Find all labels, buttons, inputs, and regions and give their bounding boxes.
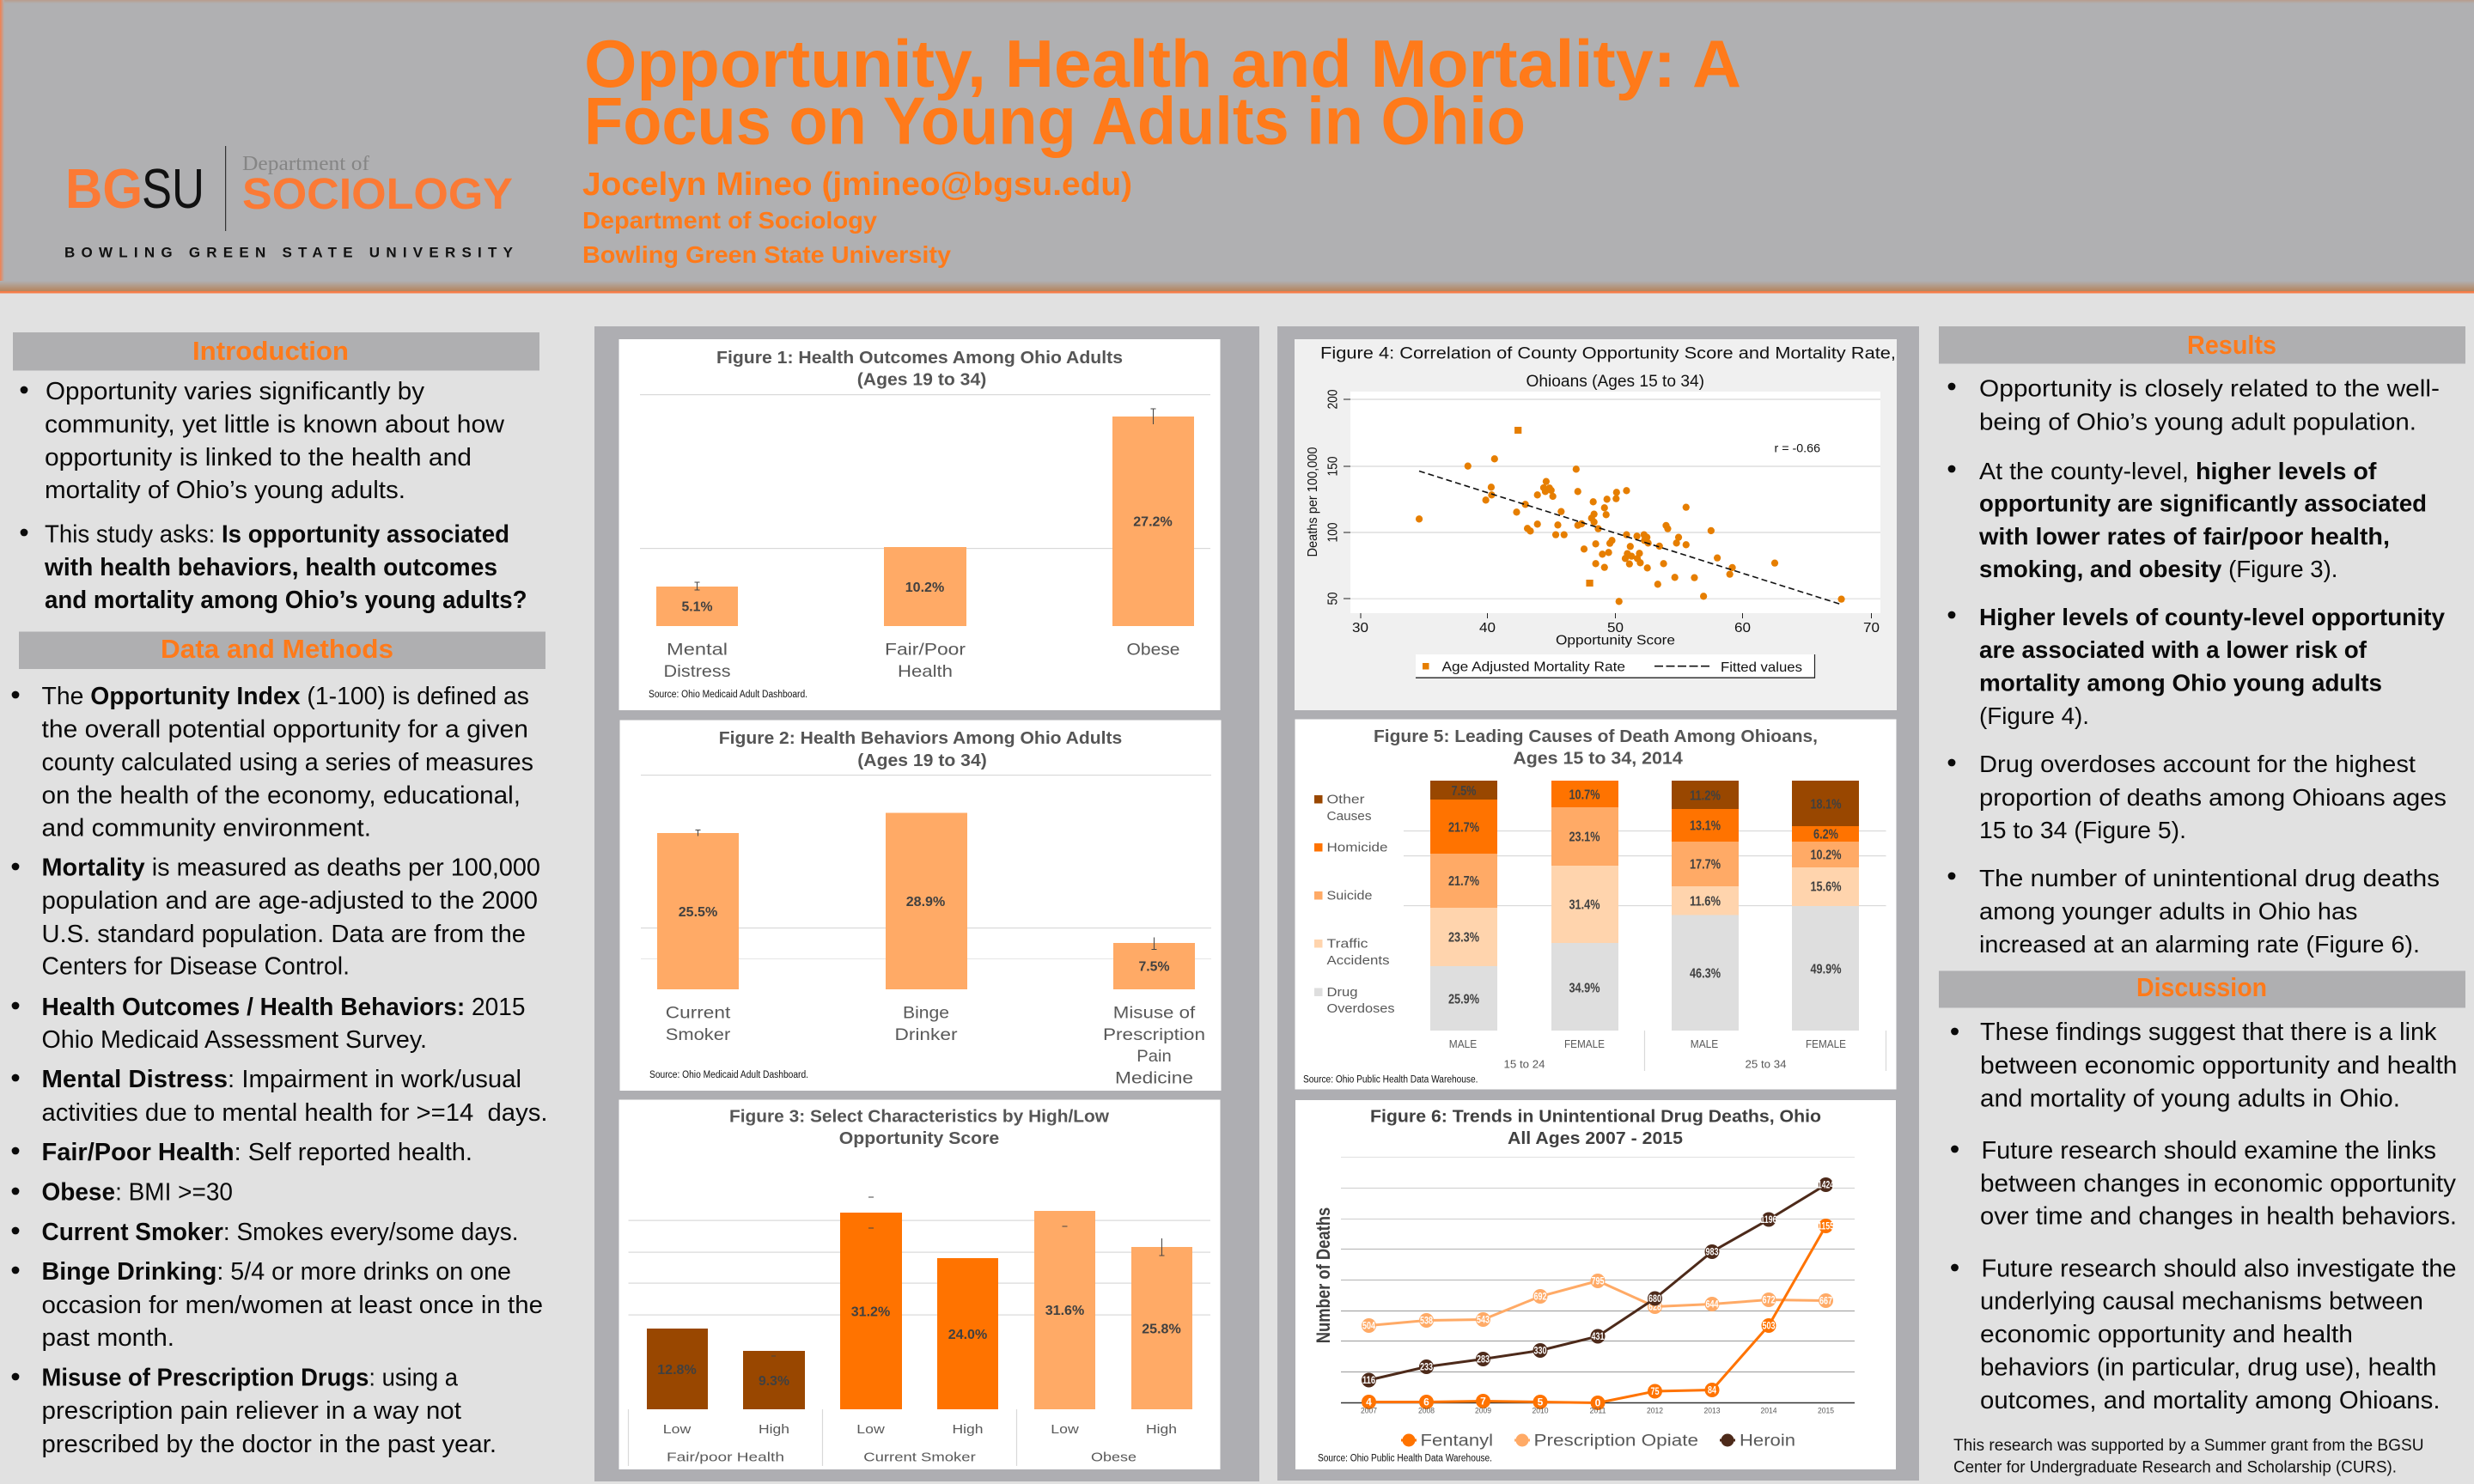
text block: introduction xyxy=(21,378,527,614)
series: prescription opiate: 538 xyxy=(1420,1314,1433,1326)
figure 1 title: (Ages 19 to 34) xyxy=(857,371,986,390)
scatter axes: 200 xyxy=(1326,389,1340,409)
figure 5 bar: male 25 to 34: 46.3% xyxy=(1690,967,1721,981)
panel: results heading xyxy=(1939,326,2465,364)
figure 5 bar: male 25 to 34: 11.2% xyxy=(1690,788,1721,804)
scatter axes: 60 xyxy=(1734,621,1751,636)
text block: discussion: Future research should examine the links xyxy=(1981,1137,2436,1165)
figure 6 source: Source: Ohio Public Health Data Warehouse. xyxy=(1318,1453,1492,1463)
scatter axes: 100 xyxy=(1326,522,1340,543)
figure 2 category labels: Current xyxy=(666,1003,731,1022)
text block: discussion: economic opportunity and health xyxy=(1980,1321,2353,1348)
series: heroin: 233 xyxy=(1420,1360,1433,1372)
series: heroin: 1196 xyxy=(1761,1213,1777,1226)
figure 3 bar chart: 25.8% xyxy=(1142,1323,1181,1336)
series: fentanyl: 5 xyxy=(1538,1396,1544,1408)
figure 5 bar: female 25 to 34: 6.2% xyxy=(1813,828,1838,842)
scatter axes: Opportunity Score xyxy=(1556,634,1675,648)
panel: introduction heading: Introduction xyxy=(192,336,349,366)
figure 5 bar: male 25 to 34: 13.1% xyxy=(1690,819,1721,833)
panel: data and methods heading: Data and Methods xyxy=(161,634,393,664)
year axis labels: 2010 xyxy=(1533,1407,1548,1415)
logo: BGSU Department of Sociology: Department of xyxy=(242,153,369,175)
text block: data and methods: Mental Distress: Impairment in work/usual xyxy=(41,1066,521,1093)
year axis labels xyxy=(1361,1407,1834,1415)
figure 2 bar chart xyxy=(657,812,1195,989)
figure 3 bar chart xyxy=(647,1197,1192,1409)
figure 5 axis labels: 25 to 34 xyxy=(1746,1058,1787,1070)
text block: results: opportunity are significantly associated xyxy=(1979,490,2427,517)
figure 5 axis labels: 15 to 24 xyxy=(1503,1058,1545,1070)
panel: figure 5 stacked bars xyxy=(1295,720,1897,1089)
series: prescription opiate: 504 xyxy=(1362,1319,1375,1331)
figure 5 bar: male 15 to 24 xyxy=(1430,781,1497,1031)
figure 2 bar chart: 25.5% xyxy=(679,905,717,920)
figure 3 bar chart: 31.6% xyxy=(1045,1304,1084,1318)
text block: data and methods: on the health of the economy, educational, xyxy=(41,782,521,809)
title: Focus on Young Adults in Ohio xyxy=(584,82,1526,158)
series: prescription opiate: 667 xyxy=(1819,1295,1832,1307)
text block: introduction: This study asks: Is opportunity associated xyxy=(45,520,509,548)
figure 3 axis labels: Obese xyxy=(1091,1450,1136,1465)
figure 6 legend: Prescription Opiate xyxy=(1534,1432,1698,1450)
figure 2 category labels: Binge xyxy=(903,1003,949,1022)
text block: data and methods: Health Outcomes / Health Behaviors: 2015 xyxy=(41,994,526,1021)
series: fentanyl: 503 xyxy=(1763,1319,1776,1331)
figure 5 axis labels: FEMALE xyxy=(1564,1038,1605,1050)
text block: data and methods: Obese: BMI >=30 xyxy=(41,1178,233,1206)
series: prescription opiate: 628 xyxy=(1648,1300,1661,1312)
scatter legend: Age Adjusted Mortality Rate xyxy=(1441,660,1625,675)
year axis labels: 2011 xyxy=(1589,1407,1606,1415)
fitted line xyxy=(1419,471,1842,605)
figure 2 bar chart: 7.5% xyxy=(1139,960,1170,974)
series: heroin: 283 xyxy=(1477,1353,1490,1365)
scatter axes: Deaths per 100,000 xyxy=(1306,447,1320,556)
logo: BGSU Department of Sociology: SU xyxy=(142,157,204,220)
text block: data and methods: and community environment. xyxy=(41,814,371,842)
text block: discussion: between economic opportunity and health xyxy=(1980,1052,2457,1080)
figure 1 category labels xyxy=(663,641,1180,681)
figure 5 axis labels: MALE xyxy=(1449,1038,1477,1050)
scatter legend xyxy=(1416,654,1814,678)
figure 3 axis labels: High xyxy=(759,1422,789,1437)
year axis labels: 2015 xyxy=(1818,1407,1834,1415)
text block: results: Higher levels of county-level opportunity xyxy=(1979,604,2446,630)
figure 5 legend: Traffic xyxy=(1326,936,1368,952)
text block: results: The number of unintentional drug deaths xyxy=(1979,865,2440,891)
figure 3 axis labels: Fair/poor Health xyxy=(667,1450,784,1465)
text block: data and methods: U.S. standard population. Data are from the xyxy=(41,921,526,948)
year axis labels: 2009 xyxy=(1475,1407,1491,1415)
scatter axes: 50 xyxy=(1607,621,1624,636)
figure 2 category labels: Smoker xyxy=(666,1025,731,1044)
figure 5 bar: male 25 to 34 xyxy=(1672,781,1739,1031)
figure 5 bar: male 15 to 24: 7.5% xyxy=(1452,784,1477,799)
figure 5 title: Ages 15 to 34, 2014 xyxy=(1513,749,1684,768)
text block: discussion: over time and changes in health behaviors. xyxy=(1980,1202,2457,1230)
text block: data and methods xyxy=(12,683,548,1458)
text block: results: with lower rates of fair/poor health, xyxy=(1978,523,2390,550)
text block: discussion: outcomes, and mortality among Ohioans. xyxy=(1980,1387,2440,1414)
text block: data and methods: county calculated using a series of measures xyxy=(41,749,533,776)
text block: data and methods: Mortality is measured as deaths per 100,000 xyxy=(41,854,540,881)
figure 6 legend: Heroin xyxy=(1740,1432,1795,1450)
figure 6 title: Figure 6: Trends in Unintentional Drug Deaths, Ohio xyxy=(1370,1108,1821,1127)
scatter axes xyxy=(1306,389,1880,648)
figure 3 axis labels: Current Smoker xyxy=(863,1450,976,1465)
figure 6 title: All Ages 2007 - 2015 xyxy=(1508,1129,1683,1148)
series: heroin: 983 xyxy=(1706,1245,1719,1257)
text block: data and methods: past month. xyxy=(41,1324,174,1352)
figure 6 legend: Fentanyl xyxy=(1421,1432,1493,1450)
figure 3 bar chart: 31.2% xyxy=(851,1305,890,1319)
series: prescription opiate: 644 xyxy=(1706,1298,1719,1311)
text block: data and methods: prescription pain reliever in a way not xyxy=(41,1397,461,1425)
scatter legend: Fitted values xyxy=(1721,660,1802,675)
figure 6 legend xyxy=(1401,1432,1795,1450)
figure 5 bar: female 15 to 24: 10.7% xyxy=(1569,788,1600,802)
scatter axes: 40 xyxy=(1479,621,1496,636)
text block: results: mortality among Ohio young adults xyxy=(1979,670,2382,696)
text block: data and methods: population and are age-adjusted to the 2000 xyxy=(41,887,538,915)
text block: results: Opportunity is closely related to the well- xyxy=(1979,374,2440,402)
figure 1 title: Figure 1: Health Outcomes Among Ohio Adults xyxy=(716,349,1123,368)
text block: data and methods: Binge Drinking: 5/4 or more drinks on one xyxy=(41,1258,511,1286)
figure 5 bar: female 25 to 34: 49.9% xyxy=(1811,962,1842,977)
panel: introduction heading xyxy=(13,332,539,371)
figure 3 bar chart: 12.8% xyxy=(657,1363,697,1378)
year axis labels: 2013 xyxy=(1704,1407,1720,1415)
author block: Department of Sociology xyxy=(582,207,877,234)
logo: BGSU Department of Sociology: BOWLING GREEN STATE UNIVERSITY xyxy=(64,244,514,261)
scatter points xyxy=(1416,427,1845,605)
scatter axes: 50 xyxy=(1326,592,1340,605)
panel: discussion heading xyxy=(1939,970,2465,1008)
figure 3 axis labels: Low xyxy=(856,1422,885,1437)
figure 2 title xyxy=(719,729,1122,770)
series: heroin: 680 xyxy=(1648,1292,1661,1305)
text block: discussion: underlying causal mechanisms between xyxy=(1980,1288,2423,1316)
logo: BGSU Department of Sociology: SOCIOLOGY xyxy=(242,169,513,218)
figure 1 category labels: Health xyxy=(898,662,953,681)
text block: introduction: mortality of Ohio’s young adults. xyxy=(45,477,405,504)
figure 5 axis labels xyxy=(1449,1031,1886,1071)
figure 5 axis labels: FEMALE xyxy=(1806,1038,1846,1050)
panel: data and methods heading xyxy=(19,632,545,669)
figure 2 category labels: Misuse of xyxy=(1113,1003,1196,1022)
figure 5 legend: Other xyxy=(1326,792,1365,807)
figure 2 category labels: Medicine xyxy=(1115,1068,1193,1087)
text block: data and methods: Centers for Disease Control. xyxy=(41,953,350,981)
figure 5 bar: female 15 to 24 xyxy=(1551,781,1618,1031)
acknowledgement note: Center for Undergraduate Research and Scholarship (CURS). xyxy=(1953,1458,2397,1477)
series: prescription opiate xyxy=(1362,1274,1833,1333)
series: fentanyl: 7 xyxy=(1480,1395,1486,1407)
series: fentanyl xyxy=(1362,1219,1834,1410)
scatter axes: 30 xyxy=(1352,621,1368,636)
figure 5 bar: female 25 to 34: 18.1% xyxy=(1811,797,1842,812)
figure 2 title: Figure 2: Health Behaviors Among Ohio Adults xyxy=(719,729,1122,748)
figure 2 category labels xyxy=(666,1003,1205,1087)
series: prescription opiate: 692 xyxy=(1534,1290,1547,1302)
figure 5 bar: female 15 to 24: 23.1% xyxy=(1569,830,1600,845)
series: fentanyl: 75 xyxy=(1651,1385,1660,1397)
figure 4 title: Figure 4: Correlation of County Opportunity Score and Mortality Rate, xyxy=(1320,345,1896,362)
y axis title: Number of Deaths xyxy=(1313,1207,1334,1343)
panel: results heading: Results xyxy=(2187,330,2276,360)
text block: introduction: community, yet little is known about how xyxy=(45,411,504,438)
series: heroin: 1424 xyxy=(1818,1178,1834,1190)
figure 3 axis labels: Low xyxy=(1051,1422,1079,1437)
series: fentanyl: 84 xyxy=(1708,1384,1716,1396)
text block: results: being of Ohio’s young adult population. xyxy=(1979,409,2416,435)
figure 5 title xyxy=(1374,727,1818,768)
text block: results: are associated with a lower risk of xyxy=(1979,636,2367,663)
series: prescription opiate: 672 xyxy=(1763,1293,1776,1305)
series: heroin: 330 xyxy=(1534,1345,1547,1357)
text block: discussion: and mortality of young adults in Ohio. xyxy=(1980,1086,2400,1113)
author block xyxy=(582,167,1132,268)
panel: figure 1 xyxy=(618,339,1220,710)
text block: discussion: behaviors (in particular, drug use), health xyxy=(1980,1353,2436,1381)
text block: data and methods: Misuse of Prescription Drugs: using a xyxy=(41,1364,458,1391)
figure 5 bar: female 25 to 34: 10.2% xyxy=(1811,848,1842,862)
figure 5 legend: Causes xyxy=(1326,809,1371,824)
text block: data and methods: Current Smoker: Smokes every/some days. xyxy=(41,1219,519,1246)
acknowledgement note: This research was supported by a Summer grant from the BGSU xyxy=(1953,1437,2424,1455)
figure 1 category labels: Mental xyxy=(667,641,728,660)
figure 2 category labels: Prescription xyxy=(1103,1025,1205,1044)
figure 3 bar chart: 24.0% xyxy=(948,1328,987,1342)
figure 1 source: Source: Ohio Medicaid Adult Dashboard. xyxy=(649,690,807,700)
logo: BGSU Department of Sociology xyxy=(64,146,514,261)
acknowledgement note xyxy=(1953,1437,2424,1477)
panel: figure 4 scatter plot xyxy=(1295,339,1897,710)
figure 5 axis labels: MALE xyxy=(1691,1038,1718,1050)
text block: results: smoking, and obesity (Figure 3). xyxy=(1979,556,2338,582)
author block: Bowling Green State University xyxy=(582,241,951,268)
logo: BGSU Department of Sociology: BG xyxy=(65,157,143,220)
figure 1 bar chart: 27.2% xyxy=(1133,515,1173,529)
panel: center-right figures backing xyxy=(1277,326,1919,1481)
series: fentanyl: 0 xyxy=(1595,1396,1601,1408)
text block: introduction: opportunity is linked to the health and xyxy=(45,444,472,471)
series: prescription opiate: 543 xyxy=(1477,1314,1490,1326)
figure 5 bar: male 15 to 24: 21.7% xyxy=(1448,874,1479,889)
text block: introduction: with health behaviors, health outcomes xyxy=(44,554,497,581)
figure 5 bar: male 15 to 24: 25.9% xyxy=(1448,993,1479,1007)
series: heroin: 431 xyxy=(1591,1330,1605,1342)
text block: discussion: These findings suggest that there is a link xyxy=(1980,1019,2437,1046)
text block: data and methods: activities due to mental health for >=14 days. xyxy=(41,1099,548,1127)
figure 5 legend: Drug xyxy=(1326,985,1357,1000)
text block: introduction: Opportunity varies significantly by xyxy=(46,378,425,405)
figure 3 axis labels xyxy=(629,1409,1177,1466)
panel: figure 3 xyxy=(618,1099,1220,1469)
figure 5 legend: Homicide xyxy=(1326,840,1388,855)
panel: figure 6 line chart xyxy=(1295,1100,1896,1469)
year axis labels: 2014 xyxy=(1761,1407,1776,1415)
correlation label: r = -0.66 xyxy=(1775,441,1820,455)
text block: results xyxy=(1948,374,2447,958)
figure 5 legend: Overdoses xyxy=(1326,1001,1395,1016)
text block: results: among younger adults in Ohio has xyxy=(1979,898,2357,924)
figure 3 title: Opportunity Score xyxy=(839,1129,999,1148)
text block: data and methods: The Opportunity Index (1-100) is defined as xyxy=(41,683,529,710)
series: fentanyl: 6 xyxy=(1423,1396,1429,1408)
figure 5 legend: Accidents xyxy=(1326,953,1390,968)
scatter axes: 150 xyxy=(1326,456,1340,476)
text block: data and methods: prescribed by the doctor in the past year. xyxy=(41,1431,497,1458)
series: heroin: 116 xyxy=(1362,1374,1375,1386)
figure 3 axis labels: High xyxy=(952,1422,983,1437)
text block: discussion: between changes in economic opportunity xyxy=(1980,1170,2457,1197)
text block: data and methods: Fair/Poor Health: Self reported health. xyxy=(41,1139,472,1166)
figure 5 bar: female 25 to 34: 15.6% xyxy=(1811,879,1842,895)
figure 5 bar: female 15 to 24: 34.9% xyxy=(1569,981,1600,996)
author block: Jocelyn Mineo (jmineo@bgsu.edu) xyxy=(582,167,1132,203)
figure 3 title xyxy=(729,1108,1109,1148)
figure 3 title: Figure 3: Select Characteristics by High/Low xyxy=(729,1108,1109,1127)
title xyxy=(584,26,1741,158)
text block: results: Drug overdoses account for the highest xyxy=(1979,751,2416,777)
figure 5 bar: female 15 to 24: 31.4% xyxy=(1569,898,1600,912)
figure 5 bar: male 25 to 34: 11.6% xyxy=(1690,895,1721,909)
series: fentanyl: 1155 xyxy=(1818,1219,1834,1232)
text block: results: 15 to 34 (Figure 5). xyxy=(1979,817,2186,843)
text block: results: (Figure 4). xyxy=(1979,702,2089,729)
header banner xyxy=(0,0,2474,294)
year axis labels: 2007 xyxy=(1361,1407,1377,1415)
figure 4 title: Ohioans (Ages 15 to 34) xyxy=(1526,373,1704,391)
figure 5 bar: female 25 to 34 xyxy=(1792,781,1859,1031)
figure 5 legend: Suicide xyxy=(1326,888,1373,903)
figure 1 category labels: Distress xyxy=(663,662,731,681)
figure 5 source: Source: Ohio Public Health Data Warehouse. xyxy=(1303,1075,1478,1086)
title: Opportunity, Health and Mortality: A xyxy=(584,26,1741,101)
figure 3 axis labels: Low xyxy=(663,1422,691,1437)
figure 1 category labels: Obese xyxy=(1127,641,1180,660)
figure 1 bar chart: 10.2% xyxy=(905,581,944,595)
text block: results: proportion of deaths among Ohioans ages xyxy=(1979,784,2447,811)
panel: figure 2 xyxy=(620,720,1222,1091)
figure 5 legend xyxy=(1314,792,1395,1016)
text block: discussion xyxy=(1951,1019,2457,1414)
figure 4 title xyxy=(1320,345,1896,391)
figure 3 bar chart: 9.3% xyxy=(759,1374,789,1389)
panel: discussion heading: Discussion xyxy=(2136,972,2267,1002)
figure 2 category labels: Drinker xyxy=(895,1025,958,1044)
figure 5 bar: male 25 to 34: 17.7% xyxy=(1690,857,1721,873)
text block: data and methods: the overall potential opportunity for a given xyxy=(41,716,528,744)
series: heroin xyxy=(1362,1177,1834,1388)
panel: center-left figures backing xyxy=(594,326,1259,1481)
series: fentanyl: 4 xyxy=(1366,1396,1372,1408)
figure 3 axis labels: High xyxy=(1146,1422,1177,1437)
figure 2 source: Source: Ohio Medicaid Adult Dashboard. xyxy=(649,1070,808,1080)
figure 2 category labels: Pain xyxy=(1136,1047,1172,1066)
figure 5 bar: male 15 to 24: 23.3% xyxy=(1448,931,1479,945)
text block: results: increased at an alarming rate (Figure 6). xyxy=(1979,931,2420,958)
figure 2 title: (Ages 19 to 34) xyxy=(857,751,987,770)
year axis labels: 2008 xyxy=(1418,1407,1435,1415)
series: prescription opiate: 795 xyxy=(1591,1274,1605,1286)
figure 6 title xyxy=(1370,1108,1821,1148)
figure 1 category labels: Fair/Poor xyxy=(885,641,966,660)
figure 1 bar chart xyxy=(656,409,1194,626)
figure 5 title: Figure 5: Leading Causes of Death Among Ohioans, xyxy=(1374,727,1818,746)
text block: data and methods: Ohio Medicaid Assessment Survey. xyxy=(41,1026,427,1054)
text block: data and methods: occasion for men/women at least once in the xyxy=(41,1292,543,1319)
text block: discussion: Future research should also investigate the xyxy=(1981,1256,2457,1283)
year axis labels: 2012 xyxy=(1647,1407,1663,1415)
scatter axes: 70 xyxy=(1863,621,1880,636)
figure 1 title xyxy=(716,349,1123,390)
figure 5 bar: male 15 to 24: 21.7% xyxy=(1448,821,1479,835)
text block: results: At the county-level, higher levels of xyxy=(1979,458,2377,484)
figure 1 bar chart: 5.1% xyxy=(682,599,713,615)
text block: introduction: and mortality among Ohio’s young adults? xyxy=(45,587,527,614)
figure 2 bar chart: 28.9% xyxy=(906,895,945,909)
